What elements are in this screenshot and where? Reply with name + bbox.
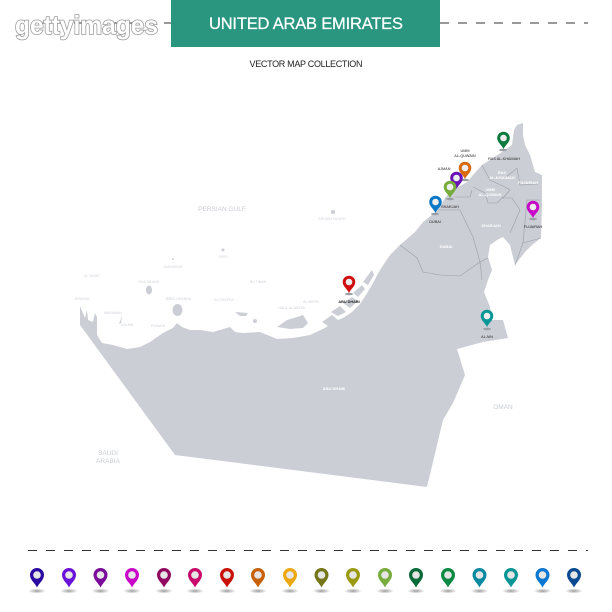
island labels: DALMA bbox=[121, 323, 134, 327]
region labels: AL-QUWAIN bbox=[478, 192, 502, 197]
subtitle: VECTOR MAP COLLECTION bbox=[250, 59, 362, 69]
emirate borders bbox=[400, 165, 541, 280]
sea and neighbour labels: OMAN bbox=[493, 404, 513, 411]
region labels: RAS bbox=[498, 170, 507, 175]
island labels: JEBEL DHANNA bbox=[165, 297, 192, 301]
region labels: SHARJAH bbox=[481, 223, 501, 228]
pin ground shadows bbox=[345, 149, 537, 330]
map pin: Umm Al Quwain bbox=[459, 162, 471, 179]
island labels: MARAWAH bbox=[104, 311, 122, 315]
map pin: Sharjah bbox=[444, 181, 456, 198]
island labels: RUWAIS bbox=[151, 324, 166, 328]
island labels: BU TINAH bbox=[250, 280, 267, 284]
map: United Arab Emirates bbox=[75, 123, 543, 487]
region labels: UMM bbox=[485, 187, 495, 192]
map pin: Fujairah bbox=[527, 201, 539, 218]
sea and neighbour labels bbox=[96, 206, 513, 465]
region labels: ABU DHABI bbox=[323, 386, 345, 391]
island labels: SIRRI bbox=[218, 255, 228, 259]
map pin: Dubai bbox=[429, 196, 442, 213]
city labels bbox=[338, 149, 543, 339]
sea and neighbour labels: ARABIA bbox=[96, 458, 121, 465]
sea and neighbour labels: SAUDI bbox=[98, 450, 118, 457]
map pin: Al Ain bbox=[481, 310, 493, 327]
island labels: AL DHAFRA bbox=[214, 298, 234, 302]
map pin: Ras Al Khaimah bbox=[497, 132, 510, 149]
city labels: AL-QUWAIN bbox=[454, 154, 476, 158]
title banner bbox=[171, 0, 440, 47]
city labels: DUBAI bbox=[429, 220, 441, 224]
map pin: Abu Dhabi bbox=[343, 276, 355, 293]
city labels: FUJAIRAH bbox=[524, 225, 543, 229]
island labels: SIR ABU NU'AYR bbox=[318, 217, 346, 221]
city labels: UMM bbox=[460, 149, 470, 153]
region labels: AL-KHAIMAH bbox=[489, 175, 515, 180]
sea and neighbour labels: PERSIAN GULF bbox=[198, 206, 246, 213]
island labels: AL MIRFA bbox=[303, 300, 320, 304]
island labels: AL YASAT bbox=[84, 274, 101, 278]
city labels: ABU DHABI bbox=[338, 300, 360, 304]
map pin: Ajman bbox=[450, 172, 463, 189]
islands bbox=[119, 210, 374, 329]
region labels: DUBAI bbox=[440, 244, 452, 249]
title banner: UNITED ARAB EMIRATES bbox=[209, 15, 403, 33]
island labels: HALIL AL ABYAD bbox=[279, 306, 306, 310]
island labels: ZARAKKUH bbox=[163, 265, 183, 269]
city labels: SHARJAH bbox=[441, 205, 459, 209]
island labels: DAS ISLAND bbox=[139, 280, 160, 284]
island labels bbox=[75, 217, 346, 328]
watermark: gettyimages bbox=[15, 10, 158, 40]
pin colour row bbox=[28, 568, 583, 594]
city labels: RAS AL-KHAIMAH bbox=[488, 157, 520, 161]
city labels: AL AIN bbox=[481, 335, 493, 339]
island labels: GHASHA bbox=[75, 297, 90, 301]
region labels: FUJAIRAH bbox=[518, 180, 538, 185]
region labels bbox=[323, 170, 538, 391]
city labels: AJMAN bbox=[438, 167, 451, 171]
